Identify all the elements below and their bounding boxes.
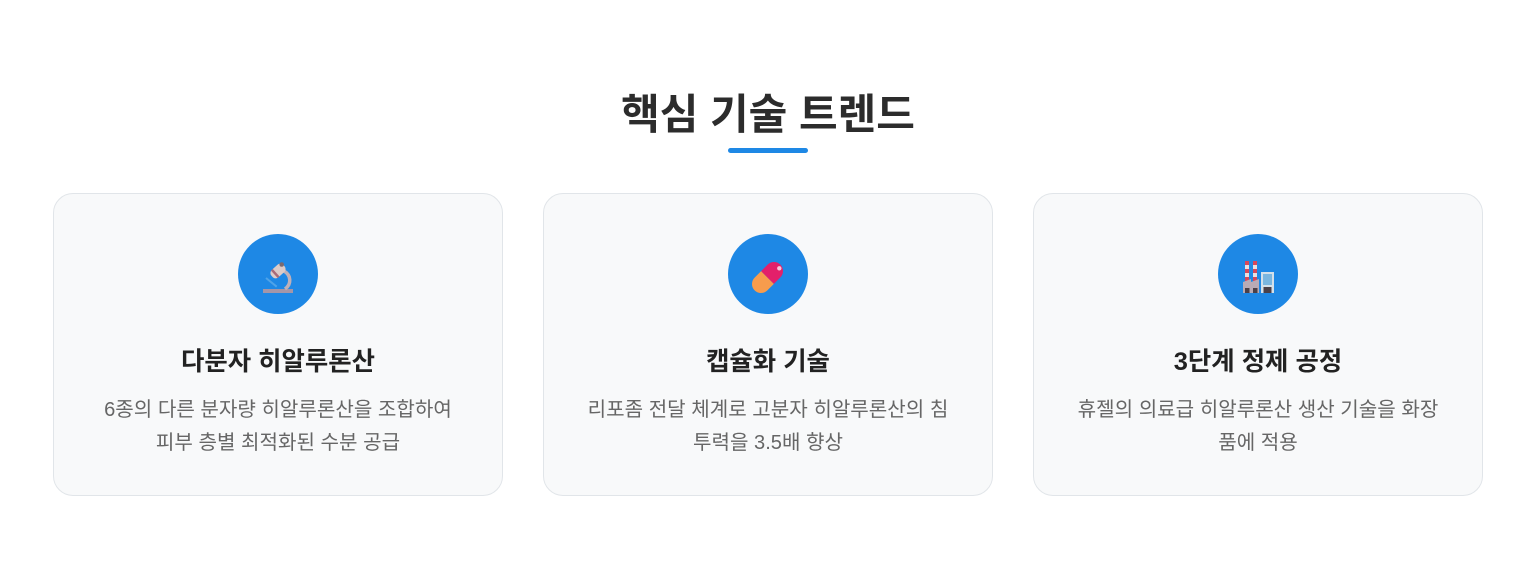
icon: factory xyxy=(1218,234,1298,314)
card description: 투력을 3.5배 향상 xyxy=(693,432,843,454)
card description: 리포좀 전달 체계로 고분자 히알루론산의 침 xyxy=(588,399,948,421)
panel: three-step purification process xyxy=(1033,193,1483,496)
card description: 피부 층별 최적화된 수분 공급 xyxy=(156,432,400,454)
title underline xyxy=(728,148,808,153)
title: 핵심 기술 트렌드 xyxy=(621,91,915,138)
card description xyxy=(588,399,948,454)
card heading: 캡슐화 기술 xyxy=(706,348,830,376)
card description: 6종의 다른 분자량 히알루론산을 조합하여 xyxy=(104,399,452,421)
card description: 휴젤의 의료급 히알루론산 생산 기술을 화장 xyxy=(1078,399,1438,421)
icon: microscope xyxy=(238,234,318,314)
card description: 품에 적용 xyxy=(1218,432,1298,454)
card heading: 3단계 정제 공정 xyxy=(1174,348,1342,376)
card heading: 다분자 히알루론산 xyxy=(181,348,375,376)
panel: encapsulation technology xyxy=(543,193,993,496)
card description xyxy=(104,399,452,454)
panel: multi-molecular hyaluronic acid xyxy=(53,193,503,496)
card description xyxy=(1078,399,1438,454)
icon: capsule xyxy=(728,234,808,314)
